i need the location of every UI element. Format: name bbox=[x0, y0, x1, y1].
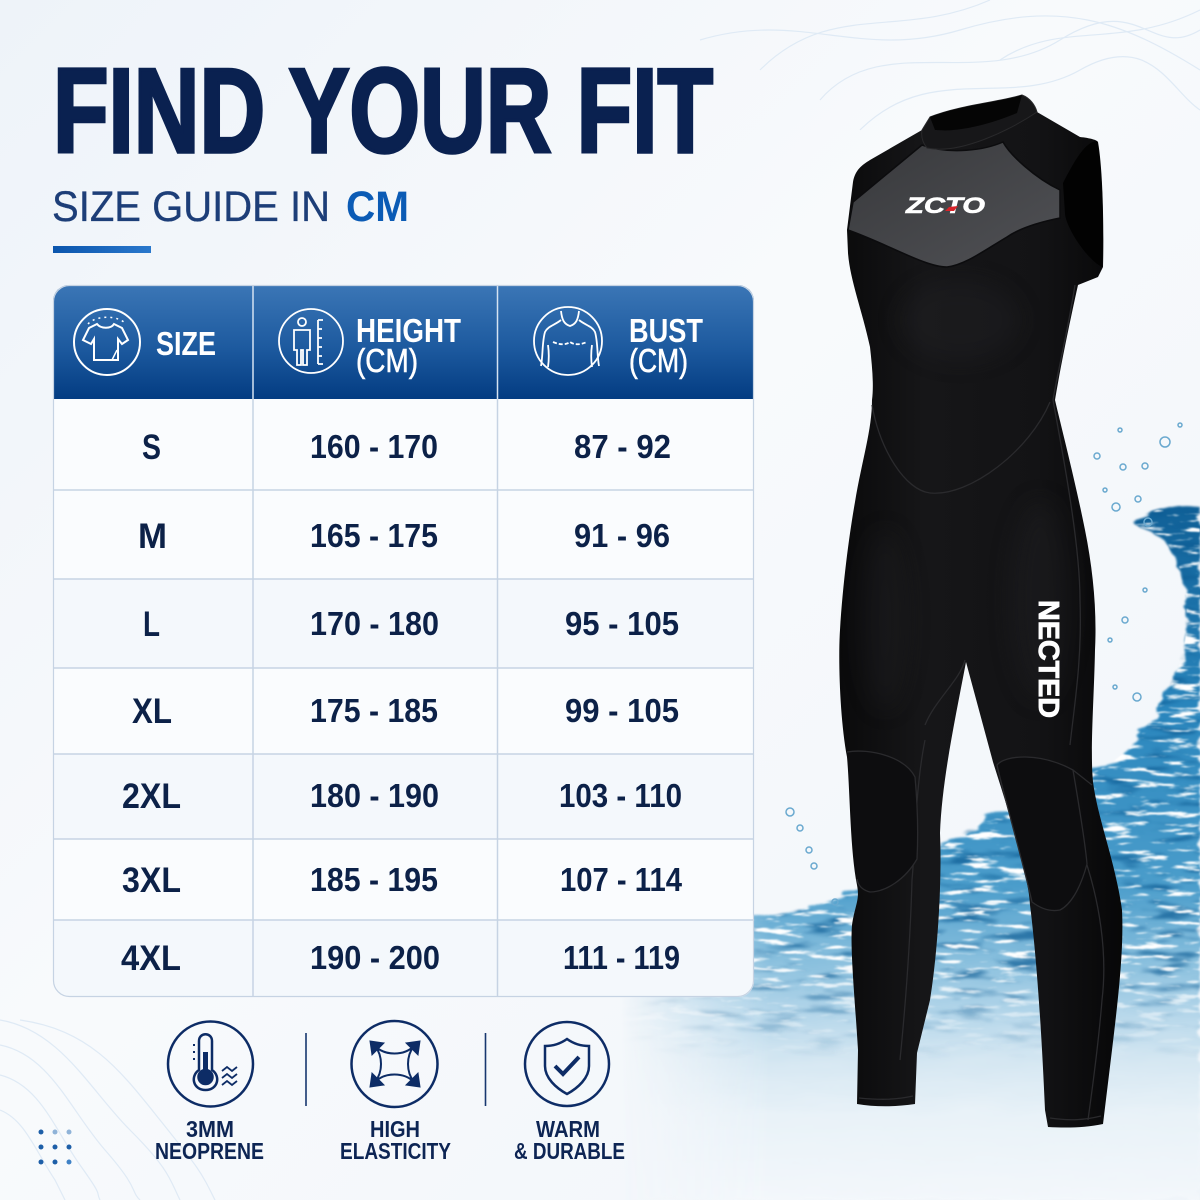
row 2XL: 180 - 190 bbox=[310, 777, 439, 814]
header: size: SIZE bbox=[156, 325, 216, 362]
row XL bbox=[132, 692, 679, 731]
size table bbox=[53, 285, 754, 997]
row S: 160 - 170 bbox=[310, 428, 438, 465]
row XL: XL bbox=[132, 692, 172, 731]
row M: M bbox=[138, 517, 167, 556]
feature: 3mm neoprene: 3MM bbox=[186, 1116, 234, 1142]
row M: 91 - 96 bbox=[574, 517, 670, 554]
feature: warm and durable: & DURABLE bbox=[514, 1138, 625, 1164]
chest panel bbox=[848, 142, 1060, 267]
row XL: 99 - 105 bbox=[565, 692, 679, 729]
row 2XL: 103 - 110 bbox=[559, 777, 682, 814]
row 3XL bbox=[122, 861, 683, 900]
feature: high elasticity bbox=[340, 1021, 451, 1164]
seams and knee pads bbox=[847, 285, 1104, 1120]
title: FIND YOUR FIT bbox=[53, 44, 713, 178]
row S: S bbox=[142, 428, 161, 467]
row 2XL: 2XL bbox=[122, 777, 181, 816]
icon: torso bbox=[534, 307, 602, 375]
armhole bbox=[1063, 141, 1103, 267]
header: height: (CM) bbox=[356, 342, 418, 379]
feature: 3mm neoprene: NEOPRENE bbox=[155, 1138, 264, 1164]
chest logo: ZCTO bbox=[905, 193, 985, 218]
row 3XL: 185 - 195 bbox=[310, 861, 438, 898]
row L: 95 - 105 bbox=[565, 605, 679, 642]
accent bar bbox=[53, 246, 151, 253]
row 4XL: 190 - 200 bbox=[310, 939, 440, 976]
row 2XL bbox=[122, 777, 682, 816]
header: bust: BUST bbox=[629, 312, 703, 349]
icon: shield with check bbox=[525, 1022, 609, 1106]
leg logo: NECTED bbox=[1032, 600, 1064, 718]
icon: t-shirt bbox=[74, 309, 140, 375]
header: bust bbox=[534, 307, 703, 379]
divider bbox=[306, 1033, 486, 1106]
feature: high elasticity: ELASTICITY bbox=[340, 1138, 451, 1164]
row S: 87 - 92 bbox=[574, 428, 671, 465]
icon: stretch arrows bbox=[352, 1021, 438, 1107]
row L: L bbox=[143, 605, 160, 644]
row 4XL bbox=[121, 939, 680, 978]
icon: thermometer bbox=[168, 1022, 253, 1106]
feature: high elasticity: HIGH bbox=[370, 1116, 420, 1142]
row S bbox=[142, 428, 671, 467]
subtitle: CM bbox=[346, 183, 409, 231]
header: bust: (CM) bbox=[629, 342, 688, 379]
row 3XL: 3XL bbox=[122, 861, 181, 900]
subtitle: SIZE GUIDE IN bbox=[52, 183, 330, 231]
collar bbox=[922, 95, 1037, 149]
row XL: 175 - 185 bbox=[310, 692, 438, 729]
header: height bbox=[279, 309, 461, 379]
icon: person with ruler bbox=[279, 309, 343, 373]
row M bbox=[138, 517, 670, 556]
decorative dots bbox=[38, 1130, 72, 1164]
thigh highlights bbox=[863, 280, 1070, 710]
row M: 165 - 175 bbox=[310, 517, 438, 554]
row 3XL: 107 - 114 bbox=[560, 861, 683, 898]
row 4XL: 4XL bbox=[121, 939, 181, 978]
row L bbox=[143, 605, 679, 644]
feature: warm and durable bbox=[514, 1022, 625, 1164]
header: size bbox=[74, 309, 216, 375]
row 4XL: 111 - 119 bbox=[563, 939, 680, 976]
header: height: HEIGHT bbox=[356, 312, 461, 349]
neck opening bbox=[930, 95, 1022, 130]
feature: 3mm neoprene bbox=[155, 1022, 264, 1164]
water splash and wave bbox=[633, 422, 1200, 1134]
wetsuit bbox=[839, 95, 1122, 1128]
feature: warm and durable: WARM bbox=[536, 1116, 600, 1142]
row L: 170 - 180 bbox=[310, 605, 439, 642]
